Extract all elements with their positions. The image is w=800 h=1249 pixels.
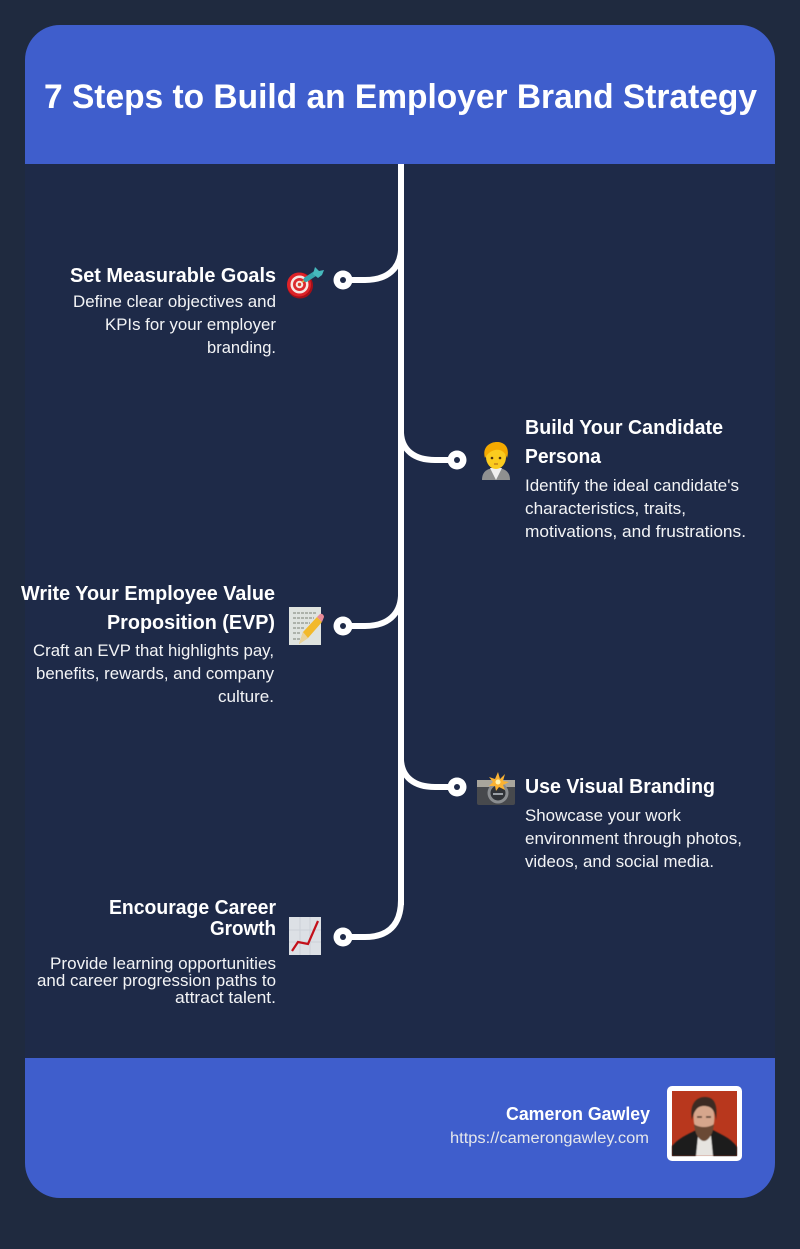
header banner	[25, 25, 775, 164]
step 5 description	[37, 955, 276, 1007]
step 4 description: videos, and social media.	[525, 853, 714, 871]
icon: camera with flash	[477, 772, 515, 805]
step 5 heading	[109, 897, 276, 940]
step 2 heading: Persona	[525, 446, 602, 468]
step 5 heading: Growth	[210, 918, 276, 940]
step 5 description: and career progression paths to	[37, 972, 276, 990]
step 3 description: culture.	[218, 688, 274, 706]
icon: office worker	[482, 442, 510, 480]
step 2 heading	[525, 417, 723, 468]
step 2: Build Your Candidate Persona	[525, 417, 746, 541]
step 2 description: motivations, and frustrations.	[525, 523, 746, 541]
step 5 description: attract talent.	[175, 989, 276, 1007]
step 2 description	[525, 477, 746, 541]
icon: dart target	[287, 267, 324, 298]
step 3 description	[33, 642, 275, 706]
timeline node 3	[334, 616, 352, 636]
author portrait	[667, 1086, 742, 1161]
step 3 heading: Proposition (EVP)	[107, 612, 275, 634]
step 1 description: KPIs for your employer	[105, 316, 277, 334]
step 4 description	[525, 807, 742, 871]
step 5 description: Provide learning opportunities	[50, 955, 276, 973]
step 3 description: Craft an EVP that highlights pay,	[33, 642, 274, 660]
timeline node 4	[448, 778, 466, 796]
step 2 description: Identify the ideal candidate's	[525, 477, 739, 495]
step 4 description: Showcase your work	[525, 807, 682, 825]
step 4 description: environment through photos,	[525, 830, 742, 848]
step 1 description: branding.	[207, 339, 276, 357]
step 3 description: benefits, rewards, and company	[36, 665, 275, 683]
step 3 heading: Write Your Employee Value	[21, 583, 275, 605]
step 1: Set Measurable Goals	[70, 265, 277, 357]
step 4 heading: Use Visual Branding	[525, 776, 715, 798]
step 2 heading: Build Your Candidate	[525, 417, 723, 439]
step 5 heading: Encourage Career	[109, 897, 276, 919]
timeline node 2	[448, 450, 466, 470]
step 4: Use Visual Branding	[525, 776, 742, 871]
step 3 heading	[21, 583, 275, 634]
timeline connector	[343, 164, 457, 937]
author name: Cameron Gawley	[506, 1104, 650, 1124]
step 2 description: characteristics, traits,	[525, 500, 686, 518]
icon: chart increasing	[289, 917, 321, 955]
step 1 description: Define clear objectives and	[73, 293, 276, 311]
timeline node 1	[334, 270, 352, 290]
step 5: Encourage Career Growth	[37, 897, 276, 1007]
panel: main body	[25, 150, 775, 1070]
step 3: Write Your Employee Value Proposition	[21, 583, 275, 706]
footer banner	[25, 1058, 775, 1198]
step 1 description	[73, 293, 277, 357]
author URL: https://camerongawley.com	[450, 1130, 649, 1147]
icon: memo and pencil	[289, 607, 324, 645]
step 1 heading: Set Measurable Goals	[70, 265, 276, 287]
timeline node 5	[334, 928, 352, 946]
title: 7 Steps to Build an Employer Brand Strategy	[44, 78, 757, 116]
